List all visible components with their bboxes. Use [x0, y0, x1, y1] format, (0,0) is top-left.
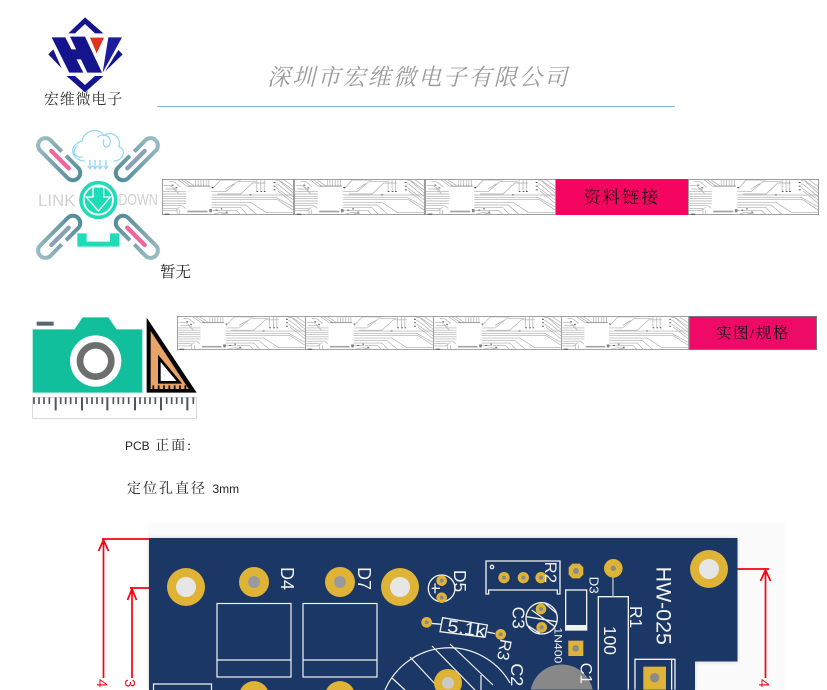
button: resource link: [556, 179, 688, 215]
pcb dimension drawing: HW-025: [652, 567, 676, 645]
red dimension lines: [98, 539, 770, 678]
pcb dimension drawing: C3: [509, 607, 529, 629]
dimension numbers: [93, 679, 772, 687]
pcb dimension drawing: 100: [600, 626, 620, 655]
title: 深圳市宏维微电子有限公司: [267, 65, 569, 90]
title underline: [157, 106, 675, 107]
pcb dimension drawing: R1: [626, 606, 646, 628]
pcb dimension drawing: C1: [577, 663, 596, 684]
text: PCB front: PCB 正面:: [125, 439, 193, 454]
logo caption: 宏维微电子: [44, 92, 123, 108]
pcb dimension drawing: D4: [277, 567, 297, 590]
icon: link download: [36, 130, 160, 260]
dimension numbers: 4: [755, 679, 772, 687]
dimension numbers: 4: [93, 679, 110, 687]
text: mounting hole diameter: 定位孔直径 3mm: [127, 482, 239, 497]
pcb dimension drawing: C2: [507, 663, 527, 686]
strip: resource link banner: [162, 179, 819, 215]
text: none available: 暂无: [160, 264, 191, 281]
pcb board: [149, 538, 738, 690]
pcb dimension drawing: 1N400: [552, 627, 564, 663]
button: resource link: 资料链接: [584, 188, 660, 207]
dimension numbers: 3: [121, 679, 138, 687]
pcb dimension drawing: D7: [354, 567, 374, 590]
pcb dimension drawing: R2: [541, 562, 560, 583]
pcb dimension drawing: 5.1k: [446, 616, 487, 641]
logo: [44, 17, 123, 108]
button: photo and specification: 实图/规格: [716, 325, 790, 342]
icon: camera and rulers: [32, 317, 197, 419]
pcb dimension drawing: D5: [450, 570, 470, 592]
pcb dimension drawing: D3: [586, 577, 601, 594]
pcb dimension drawing: R3: [493, 638, 515, 662]
button: photo and specification: [689, 316, 817, 350]
icon: link download: LINK: [38, 191, 75, 210]
icon: link download: DOWN: [118, 192, 158, 209]
pcb dimension drawing: [93, 536, 772, 690]
strip: photo and specification banner: [177, 316, 817, 350]
